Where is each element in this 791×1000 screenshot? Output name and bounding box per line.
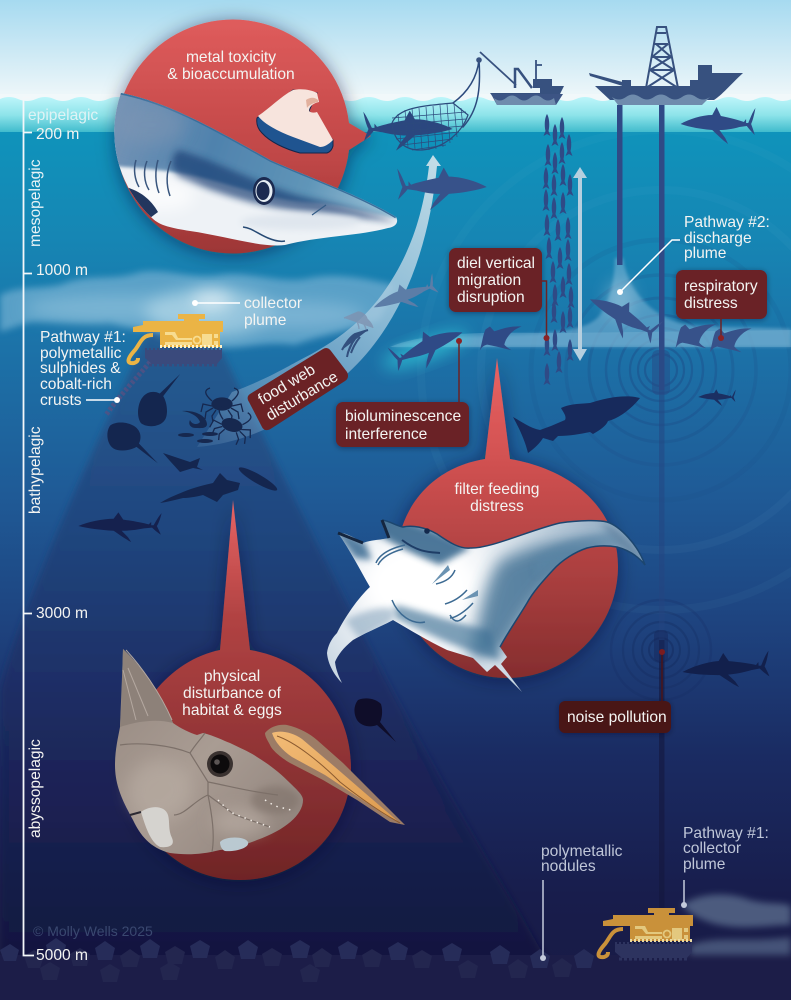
- collector vehicle: lower: [598, 908, 693, 959]
- label: bioluminescence interference: bioluminescence: [345, 408, 461, 425]
- text: pathway 1 collector plume: plume: [683, 856, 725, 873]
- text: pathway 2 discharge plume: Pathway #2:: [684, 214, 770, 231]
- silhouette: glowing bioluminescent fish: [379, 318, 471, 379]
- silhouette: chimaera: [160, 473, 240, 503]
- text: collector plume: collector: [244, 295, 302, 312]
- icon: skate 1: [138, 374, 180, 426]
- heading: bioaccumulation: & bioaccumulation: [167, 66, 295, 83]
- label: food web disturbance: [248, 348, 348, 430]
- text: pathway 1 crusts: [40, 329, 126, 409]
- label: diel vertical migration disruption: [449, 248, 550, 341]
- right discharge plume: [390, 258, 791, 347]
- depth label: mesopelagic: mesopelagic: [27, 159, 44, 247]
- silhouette: ray: [163, 453, 203, 472]
- icon: crab 1: [201, 388, 243, 422]
- icon: crab 2: [207, 404, 256, 448]
- text: polymetallic nodules: nodules: [541, 858, 596, 875]
- illustration: blue shark head: [114, 93, 398, 246]
- text: pathway 1 collector plume: [681, 825, 769, 908]
- text: pathway 1 collector plume: collector: [683, 840, 741, 857]
- text: polymetallic nodules: [540, 843, 623, 961]
- callout: filter feeding distress: [320, 358, 660, 700]
- heading: metal toxicity: metal toxicity: [186, 49, 276, 66]
- silhouette: whale shark: [513, 396, 640, 453]
- text: polymetallic nodules: polymetallic: [541, 843, 623, 860]
- silhouette: deep shark: [681, 650, 771, 691]
- icon: small fish: [178, 432, 218, 443]
- label: diel vertical migration disruption: diel vertical: [457, 255, 535, 272]
- label: noise pollution: noise pollution: [567, 709, 667, 726]
- depth label: 5000 m: 5000 m: [36, 947, 88, 964]
- label: bioluminescence interference: interference: [345, 426, 427, 443]
- sonar rings: midwater noise: [421, 130, 791, 610]
- double arrow: vertical migration: [573, 167, 587, 361]
- food web arrow: [197, 155, 441, 447]
- drill pipes: [617, 105, 670, 920]
- icon: fishing net and trawl: [392, 60, 480, 150]
- heading: filter feeding: filter feeding: [455, 481, 539, 498]
- text: pathway 2 discharge plume: [617, 214, 770, 295]
- depth label: abyssopelagic: abyssopelagic: [27, 739, 44, 838]
- silhouette: small deep shark: [698, 389, 736, 406]
- silhouette: shark near plume: [581, 285, 664, 351]
- text: pathway 1 crusts: sulphides &: [40, 360, 121, 377]
- silhouette: manta right 2: [710, 328, 752, 352]
- icon: shark steak: [257, 89, 333, 153]
- callout: metal toxicity: [100, 20, 410, 255]
- depth label: 200 m: 200 m: [36, 126, 79, 143]
- label: diel vertical migration disruption: migration: [457, 272, 521, 289]
- silhouette: surface shark: [681, 107, 755, 144]
- label: respiratory distress: distress: [684, 295, 738, 312]
- text: pathway 1 collector plume: Pathway #1:: [683, 825, 769, 842]
- text: collector plume: plume: [244, 312, 286, 329]
- silhouette: manta right 1: [675, 324, 716, 348]
- fishing boat: [476, 52, 564, 105]
- text: pathway 1 crusts: polymetallic: [40, 345, 122, 362]
- illustration: ghost shark head: [115, 649, 303, 854]
- text: pathway 1 crusts: cobalt-rich: [40, 376, 112, 393]
- silhouette: small shark on arrow: [369, 273, 441, 321]
- depth label: bathypelagic: bathypelagic: [27, 426, 44, 514]
- label: noise pollution: [559, 649, 671, 733]
- text: pathway 1 crusts: crusts: [40, 392, 82, 409]
- silhouette: dark skate: [354, 698, 396, 742]
- sulphide crust band: [106, 362, 150, 415]
- illustration: egg case: [265, 725, 405, 825]
- drill ship: [589, 27, 743, 105]
- silhouette: sleeper shark: [78, 512, 162, 542]
- heading: physical: physical: [204, 668, 260, 685]
- icon: squid pair: [342, 312, 373, 357]
- depth axis: [24, 98, 98, 964]
- seamount: [0, 325, 570, 1000]
- fish school: [542, 114, 574, 385]
- biota on seamount: [78, 374, 279, 542]
- silhouette: lantern fish: [237, 464, 279, 494]
- text: pathway 2 discharge plume: discharge: [684, 230, 752, 247]
- bottom collector plume: [682, 895, 791, 955]
- illustration: manta ray: [327, 519, 646, 692]
- depth label: epipelagic: epipelagic: [28, 107, 98, 124]
- label: respiratory distress: respiratory: [684, 278, 758, 295]
- text: pathway 1 crusts: Pathway #1:: [40, 329, 126, 346]
- label: food web disturbance: disturbance: [263, 368, 341, 424]
- label: diel vertical migration disruption: disruption: [457, 289, 525, 306]
- silhouette: manta near label: [480, 326, 522, 350]
- left collector plume cloud: [0, 271, 395, 347]
- silhouette: mesopelagic shark: [397, 167, 487, 210]
- label: bioluminescence interference: [336, 338, 469, 447]
- icon: skate 2: [107, 423, 158, 463]
- depth label: 3000 m: 3000 m: [36, 605, 88, 622]
- collector vehicle: upper: [128, 314, 223, 365]
- sonar rings: deep noise: [611, 600, 711, 700]
- heading: disturbance of: disturbance of: [183, 685, 282, 702]
- heading: habitat and eggs: habitat & eggs: [182, 702, 282, 719]
- text: pathway 2 discharge plume: plume: [684, 245, 726, 262]
- icon: shrimp: [182, 411, 207, 428]
- label: food web disturbance: food web: [255, 361, 319, 408]
- seafloor: [0, 938, 791, 1000]
- depth label: 1000 m: 1000 m: [36, 262, 88, 279]
- shark in net: [363, 111, 453, 151]
- label: respiratory distress: [676, 270, 767, 341]
- callout: physical disturbance: [115, 500, 405, 880]
- text: collector plume: [192, 295, 302, 329]
- credit: © Molly Wells 2025: [33, 923, 153, 939]
- heading: distress: distress: [470, 498, 524, 515]
